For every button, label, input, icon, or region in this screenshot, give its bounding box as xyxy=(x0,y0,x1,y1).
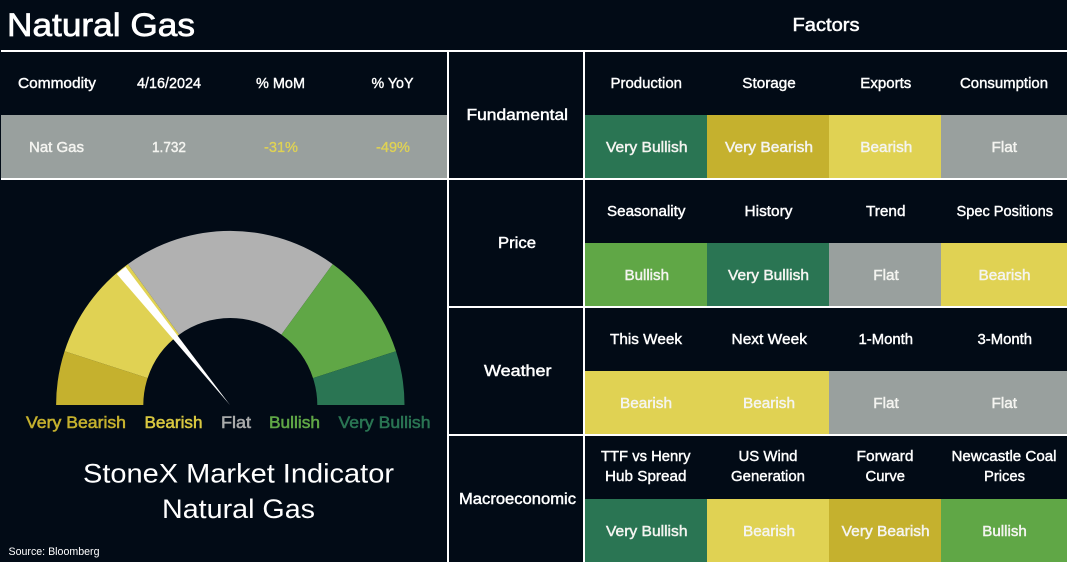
factor headers: Newcastle Coal xyxy=(952,449,1056,465)
row label: nat gas: Nat Gas xyxy=(29,140,84,156)
factor headers: Forward xyxy=(856,449,914,465)
factor ratings: Very Bearish xyxy=(842,524,930,540)
gauge segment: very bearish xyxy=(56,351,148,405)
factor headers xyxy=(610,332,1032,348)
factor ratings: Bearish xyxy=(620,396,672,412)
factor ratings: Very Bullish xyxy=(606,524,688,540)
factor ratings: Very Bullish xyxy=(728,268,809,284)
factor headers: Seasonality xyxy=(607,204,686,220)
factor headers: 1-Month xyxy=(858,332,913,348)
factor ratings: Bearish xyxy=(860,140,912,156)
column header: year over year: % YoY xyxy=(372,76,414,92)
category: weather: Weather xyxy=(484,363,552,380)
factor ratings xyxy=(585,115,1067,178)
factor ratings xyxy=(585,371,1067,434)
legend: very bullish: Very Bullish xyxy=(338,413,430,432)
gauge segment: bullish xyxy=(281,264,396,378)
category: price: Price xyxy=(498,235,536,252)
factor ratings: Bearish xyxy=(743,396,795,412)
factor headers: Trend xyxy=(866,204,906,220)
factor headers: 3-Month xyxy=(978,332,1032,348)
factor ratings: Very Bearish xyxy=(725,140,813,156)
legend: bearish: Bearish xyxy=(144,413,202,432)
source note: Source: Bloomberg xyxy=(8,546,100,558)
gauge segment: very bullish xyxy=(313,351,404,405)
factor headers: Production xyxy=(610,76,682,92)
panel: macroeconomic xyxy=(459,449,1067,562)
title: Natural Gas xyxy=(7,7,195,43)
factor ratings: Flat xyxy=(873,268,899,284)
factor headers: Consumption xyxy=(960,76,1048,92)
factor headers: Prices xyxy=(984,469,1025,485)
gauge segment: bearish xyxy=(65,264,179,378)
column header: month over month: % MoM xyxy=(256,76,305,92)
factor headers: Exports xyxy=(860,76,911,92)
factor headers xyxy=(601,449,1056,485)
gauge needle xyxy=(117,267,230,405)
factor ratings: Flat xyxy=(992,396,1017,412)
legend: flat: Flat xyxy=(221,413,251,432)
factor ratings xyxy=(585,499,1067,562)
value: yoy change: -49% xyxy=(376,140,410,156)
factor headers: This Week xyxy=(610,332,683,348)
factor headers: Curve xyxy=(866,469,905,485)
factor ratings: Bullish xyxy=(982,524,1027,540)
gauge legend xyxy=(26,413,430,432)
column header: commodity: Commodity xyxy=(18,76,97,92)
factor ratings: Flat xyxy=(873,396,899,412)
factor headers: Next Week xyxy=(732,332,808,348)
chart: gauge xyxy=(56,231,405,405)
panel: weather xyxy=(484,332,1067,434)
gauge caption xyxy=(83,458,394,524)
factor ratings: Flat xyxy=(992,140,1017,156)
factor ratings: Bearish xyxy=(978,268,1030,284)
factor headers xyxy=(610,76,1048,92)
factor headers: TTF vs Henry xyxy=(601,449,691,465)
panel: commodity table xyxy=(1,76,447,178)
category: macroeconomic: Macroeconomic xyxy=(459,491,576,508)
factor headers xyxy=(607,204,1053,220)
factor headers: US Wind xyxy=(738,449,798,465)
factor ratings: Bullish xyxy=(624,268,669,284)
gauge caption: Natural Gas xyxy=(162,494,315,524)
value: price: 1.732 xyxy=(152,140,186,156)
legend: very bearish: Very Bearish xyxy=(26,413,126,432)
panel: price xyxy=(498,204,1067,306)
factor ratings: Bearish xyxy=(743,524,795,540)
value: mom change: -31% xyxy=(264,140,298,156)
legend: bullish: Bullish xyxy=(269,413,320,432)
category: fundamental: Fundamental xyxy=(466,107,568,124)
factor ratings: Very Bullish xyxy=(606,140,688,156)
factor headers: Hub Spread xyxy=(605,469,686,485)
factor ratings xyxy=(585,243,1067,306)
panel: fundamental xyxy=(466,76,1067,178)
factor headers: Spec Positions xyxy=(956,204,1053,220)
factor headers: Generation xyxy=(731,469,805,485)
gauge caption: StoneX Market Indicator xyxy=(83,458,394,488)
heading: factors: Factors xyxy=(792,15,860,35)
factor headers: History xyxy=(744,204,793,220)
gauge segment: flat xyxy=(128,231,333,335)
factor headers: Storage xyxy=(742,76,796,92)
column header: date: 4/16/2024 xyxy=(137,76,201,92)
